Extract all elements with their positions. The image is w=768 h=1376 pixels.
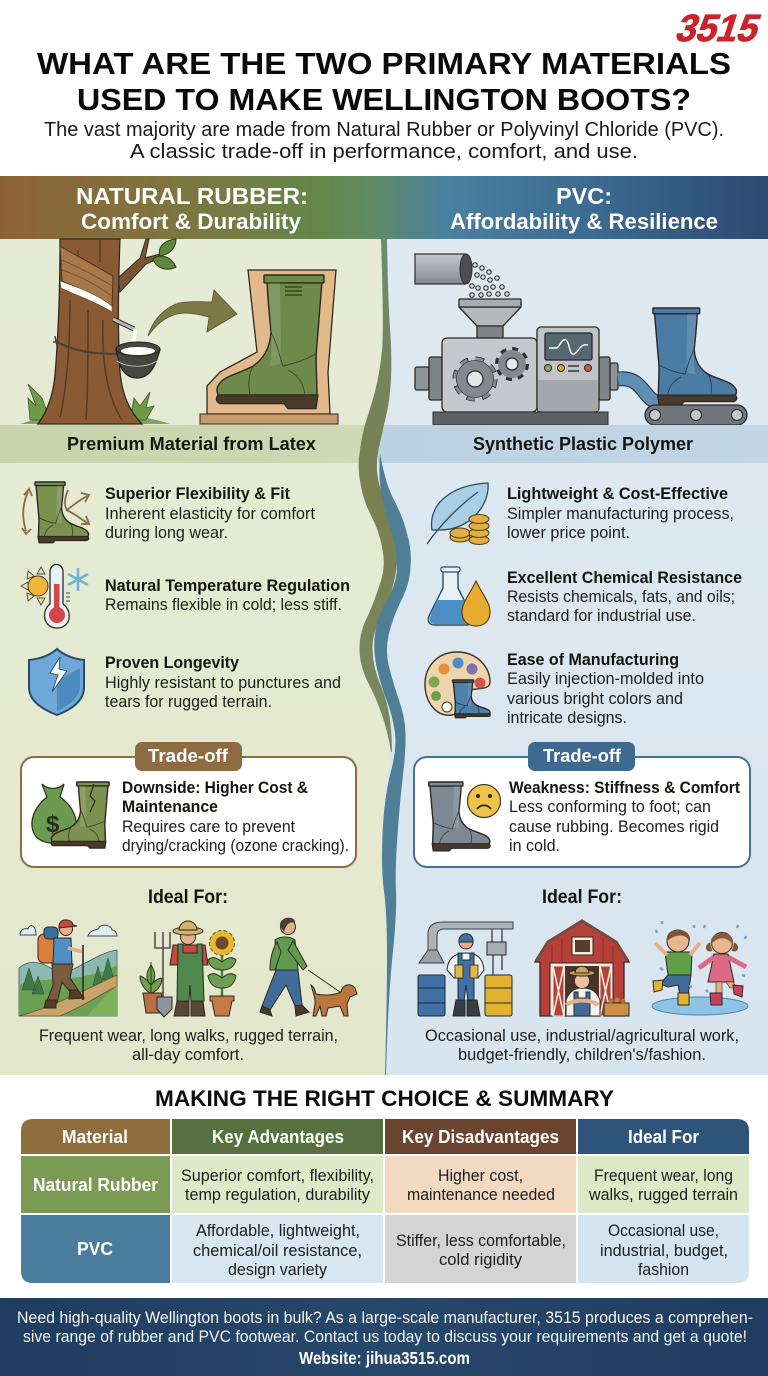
icon: shield with lightning [29, 649, 84, 715]
table row: natural rubber: walks, rugged terrain [588, 1185, 738, 1204]
ideal-for text: PVC: Occasional use, industrial/agricultural work, [425, 1026, 739, 1045]
heading: summary: MAKING THE RIGHT CHOICE & SUMMARY [155, 1086, 614, 1111]
callout: natural rubber trade-off: drying/cracking (ozone cracking). [122, 836, 349, 855]
table row: PVC: Occasional use, [608, 1221, 719, 1240]
table row: natural rubber: maintenance needed [407, 1185, 555, 1204]
sub-band: natural rubber [0, 425, 368, 463]
feature: chemical resistance: standard for industrial use. [507, 606, 696, 625]
feature: ease of manufacturing: Ease of Manufacturing [507, 650, 679, 669]
ideal-for text: natural rubber [39, 1026, 338, 1064]
ideal-for text: natural rubber: all-day comfort. [132, 1045, 244, 1064]
callout: PVC trade-off [414, 742, 750, 867]
hose [618, 379, 660, 403]
table row: natural rubber: Higher cost, [438, 1166, 523, 1185]
title: USED TO MAKE WELLINGTON BOOTS? [77, 82, 691, 117]
callout: natural rubber trade-off: Downside: Higher Cost & [122, 778, 308, 797]
illustration: latex tapping tree [20, 239, 176, 424]
illustration: barn [535, 920, 629, 1016]
feature: chemical resistance: Excellent Chemical Resistance [507, 568, 742, 587]
icon: thermometer with sun and snowflake [21, 564, 88, 628]
table header row: Key Advantages [212, 1127, 344, 1147]
table row: PVC: Affordable, lightweight, [196, 1221, 360, 1240]
panel: PVC background [340, 239, 768, 1075]
heading: ideal for, PVC: Ideal For: [542, 887, 622, 908]
feature: longevity [29, 649, 341, 715]
footer call to action [0, 1298, 768, 1376]
heading: PVC [450, 183, 718, 234]
illustration: industrial worker [418, 922, 513, 1016]
brand logo: 3515 [671, 8, 766, 50]
icon: feather and coins [427, 483, 489, 544]
callout: natural rubber trade-off [21, 742, 356, 867]
table row: natural rubber: Frequent wear, long [594, 1166, 733, 1185]
icon: money bag and cracked boot: $ [46, 811, 60, 838]
heading: natural rubber: Comfort & Durability [81, 209, 302, 234]
icon: grey boot with sad face [429, 782, 500, 851]
feature: ease of manufacturing: intricate designs. [507, 708, 627, 727]
table row: PVC: design variety [228, 1260, 327, 1279]
feature: flexibility [22, 482, 315, 543]
gears [456, 350, 526, 398]
callout: PVC trade-off: in cold. [509, 836, 560, 855]
illustration: farmer [140, 921, 236, 1017]
header band [0, 176, 768, 239]
table row: natural rubber: Superior comfort, flexibility, [181, 1166, 374, 1185]
feature: temperature: Remains flexible in cold; less stiff. [105, 595, 342, 614]
callout: natural rubber trade-off: Requires care to prevent [122, 817, 295, 836]
summary table [21, 1119, 749, 1283]
subtitle: A classic trade-off in performance, comfort, and use. [130, 140, 638, 163]
feature: longevity: Proven Longevity [105, 653, 240, 672]
sub-band: PVC [378, 425, 768, 463]
pellets [470, 263, 509, 297]
subtitle [44, 118, 724, 163]
pill: trade-off: Trade-off [148, 745, 229, 766]
table row: PVC: chemical/oil resistance, [193, 1241, 362, 1260]
table row: PVC: cold rigidity [439, 1250, 522, 1269]
subtitle: The vast majority are made from Natural Rubber or Polyvinyl Chloride (PVC). [44, 118, 724, 141]
illustration: children in puddle [652, 921, 748, 1015]
pill: trade-off [528, 742, 635, 771]
table row: PVC [21, 1215, 749, 1283]
table row: PVC: industrial, budget, [600, 1241, 728, 1260]
hopper [459, 299, 521, 338]
ideal-for text: PVC: budget-friendly, children's/fashion. [458, 1045, 706, 1064]
title [37, 46, 731, 117]
callout: PVC trade-off: cause rubbing. Becomes rigid [509, 817, 719, 836]
feature: lightweight: Simpler manufacturing process, [507, 504, 734, 523]
illustration: natural rubber boot [200, 270, 338, 424]
icon: palette and boot [425, 652, 490, 718]
feature: longevity: Highly resistant to punctures and [105, 673, 341, 692]
illustration: PVC extrusion machine [415, 254, 660, 425]
table row: PVC: fashion [638, 1260, 689, 1279]
illustration: PVC boot on conveyor [645, 308, 747, 425]
table header row [21, 1119, 749, 1154]
divider wave [359, 239, 411, 1075]
ideal-for text: natural rubber: Frequent wear, long walks, rugged terrain, [39, 1026, 338, 1045]
sub-band: PVC: Synthetic Plastic Polymer [473, 433, 693, 454]
heading: PVC: Affordability & Resilience [450, 209, 718, 234]
heading: natural rubber [76, 183, 308, 234]
illustration: hiker [19, 920, 117, 1016]
callout: natural rubber trade-off: Maintenance [122, 797, 218, 816]
title: WHAT ARE THE TWO PRIMARY MATERIALS [37, 46, 731, 81]
pellet pipe [415, 254, 472, 284]
feature: longevity: tears for rugged terrain. [105, 692, 272, 711]
table row: natural rubber [21, 1156, 749, 1213]
icon: money bag and cracked boot [32, 782, 109, 848]
table row: natural rubber: temp regulation, durability [185, 1185, 370, 1204]
feature: lightweight [427, 483, 734, 544]
table row: PVC: PVC [77, 1239, 113, 1259]
table row: PVC: Stiffer, less comfortable, [396, 1231, 566, 1250]
feature: flexibility: Superior Flexibility & Fit [105, 484, 290, 503]
heading: ideal for, natural rubber: Ideal For: [148, 887, 228, 908]
heading: PVC: PVC: [556, 183, 612, 209]
icon: flexing boot [22, 482, 89, 543]
illustration: person walking dog [260, 918, 357, 1016]
feature: ease of manufacturing: various bright colors and [507, 689, 683, 708]
feature: ease of manufacturing [425, 650, 704, 727]
arrow: latex to boot [148, 290, 237, 336]
feature: flexibility: Inherent elasticity for comfort [105, 504, 315, 523]
pill: trade-off: Trade-off [543, 745, 622, 766]
table row: natural rubber: Natural Rubber [33, 1175, 158, 1195]
feature: ease of manufacturing: Easily injection-molded into [507, 669, 704, 688]
footer call to action: Website: jihua3515.com [299, 1348, 470, 1368]
feature: lightweight: lower price point. [507, 523, 630, 542]
icon: flask and oil drop [428, 567, 490, 626]
ideal-for text: PVC [425, 1026, 739, 1064]
heading: natural rubber: NATURAL RUBBER: [76, 183, 308, 209]
panel: natural rubber background [0, 239, 391, 1075]
feature: lightweight: Lightweight & Cost-Effective [507, 484, 728, 503]
pill: trade-off [135, 742, 242, 771]
feature: flexibility: during long wear. [105, 523, 228, 542]
control screen [544, 333, 592, 372]
table header row: Key Disadvantages [402, 1127, 559, 1147]
feature: temperature [21, 564, 350, 628]
table header row: Material [62, 1127, 128, 1147]
callout: PVC trade-off: Less conforming to foot; can [509, 797, 711, 816]
feature: temperature: Natural Temperature Regulation [105, 576, 350, 595]
table header row: Ideal For [628, 1127, 699, 1147]
sub-band: natural rubber: Premium Material from Latex [67, 433, 317, 454]
feature: chemical resistance: Resists chemicals, fats, and oils; [507, 587, 735, 606]
feature: chemical resistance [428, 567, 742, 626]
callout: PVC trade-off: Weakness: Stiffness & Comfort [509, 778, 740, 797]
